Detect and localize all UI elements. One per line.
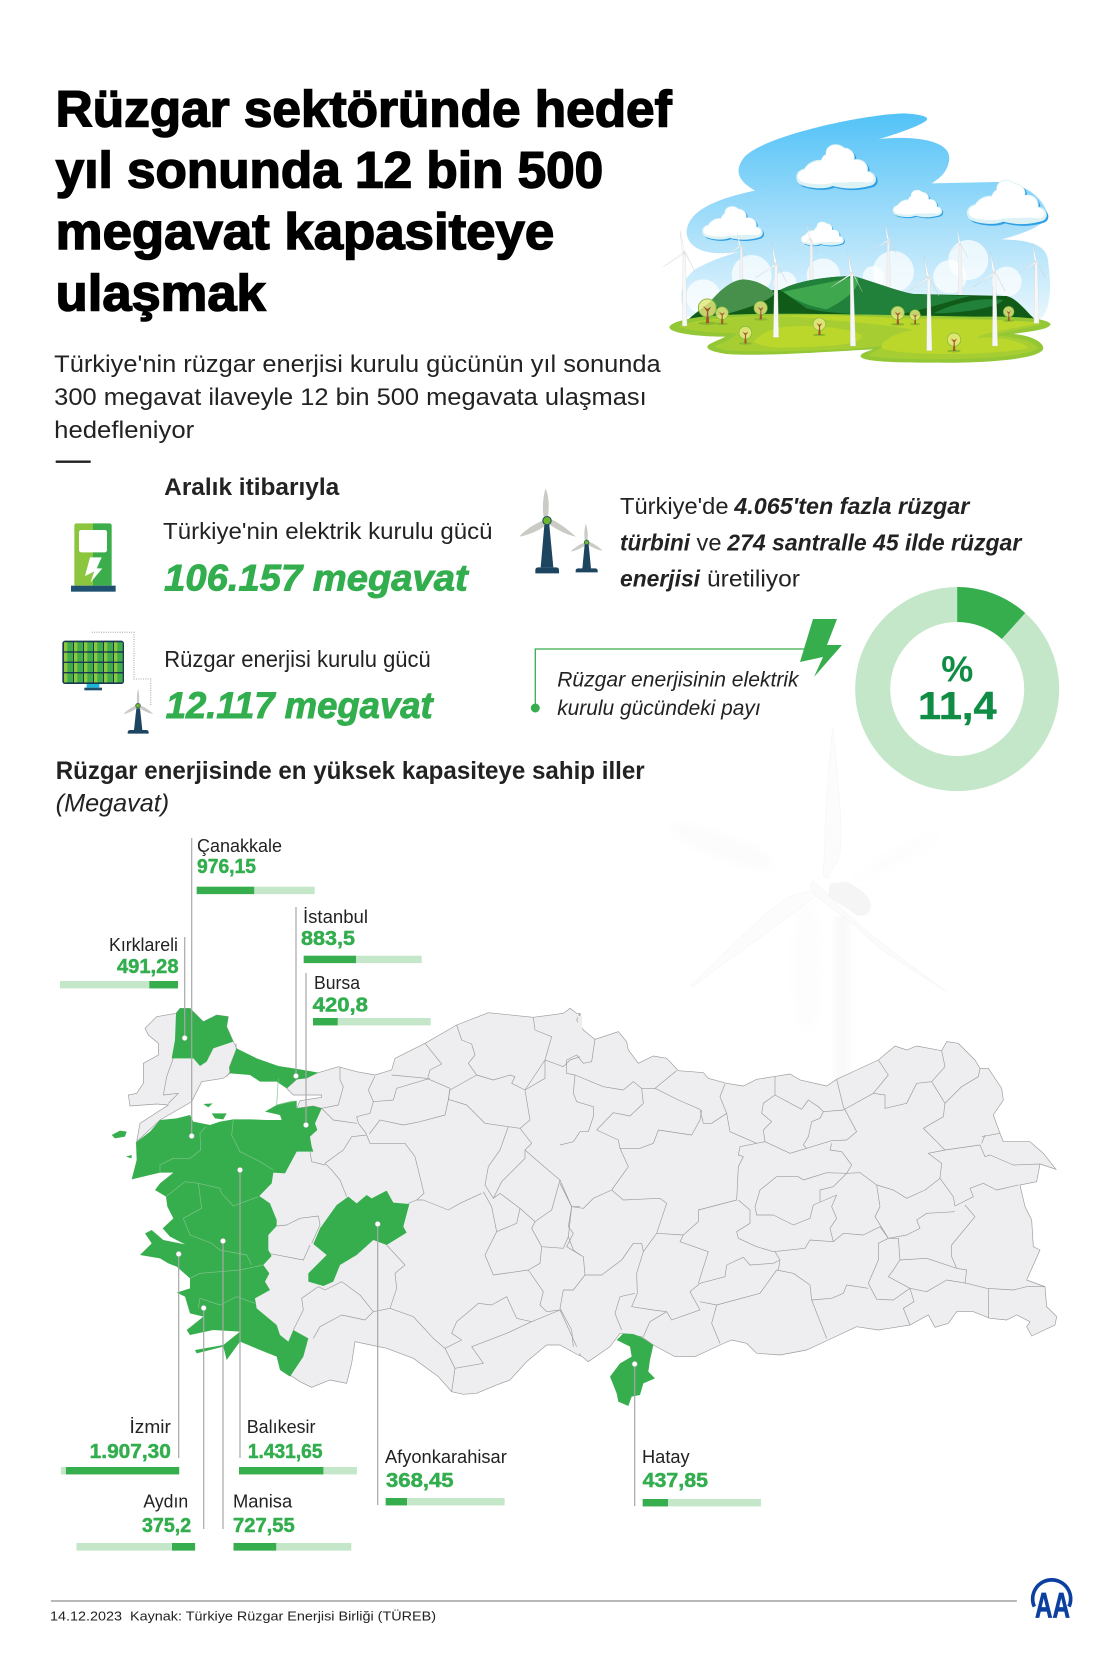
label: Afyonkarahisar: 368,45	[386, 1470, 454, 1492]
stat: total installed power	[163, 518, 492, 599]
icon: solar panel with turbine	[62, 632, 153, 734]
donut value	[918, 649, 997, 728]
leader lines and markers	[176, 838, 637, 1529]
label: Hatay: Hatay	[642, 1447, 690, 1467]
text: turbine and plant counts: enerjisi	[620, 566, 700, 592]
label: İstanbul: İstanbul	[303, 907, 368, 927]
stat: total installed power: 106.157 megavat	[164, 558, 469, 599]
label: Çanakkale: Çanakkale	[197, 836, 282, 856]
logo: AA: AA	[1035, 1586, 1070, 1625]
label: Balıkesir	[239, 1417, 357, 1474]
label: Aydın: Aydın	[143, 1492, 188, 1512]
label: Balıkesir: Balıkesir	[247, 1417, 316, 1437]
subtitle text: 300 megavat ilaveyle 12 bin 500 megavata ulaşması	[54, 384, 647, 411]
text: turbine and plant counts: 274 santralle 45 ilde rüzgar	[726, 530, 1023, 556]
label: Manisa: Manisa	[233, 1492, 293, 1512]
footer rule	[51, 1600, 1017, 1602]
highlighted province: Hatay	[610, 1333, 655, 1406]
icon: two wind turbines	[519, 488, 603, 573]
label: Hatay: 437,85	[643, 1470, 708, 1492]
text: turbine and plant counts: üretiliyor	[707, 566, 800, 592]
label: Kırklareli	[60, 935, 178, 988]
donut chart: wind share	[855, 587, 1059, 791]
title: ulaşmak	[56, 265, 266, 322]
stat: wind installed power: Rüzgar enerjisi kurulu gücü	[164, 646, 431, 672]
label: Bursa: Bursa	[314, 973, 361, 993]
highlighted province: İstanbul	[229, 1048, 318, 1088]
label: İstanbul: 883,5	[301, 928, 355, 950]
label: Balıkesir: 1.431,65	[248, 1441, 322, 1463]
label: İstanbul	[301, 907, 422, 963]
highlighted province: Afyonkarahisar	[308, 1191, 409, 1286]
watermark: large faint wind turbine	[666, 727, 947, 1080]
islands	[112, 1103, 227, 1158]
subtitle text	[54, 351, 661, 463]
title: yıl sonunda 12 bin 500	[56, 141, 603, 198]
highlighted provinces: Aegean block	[132, 1101, 322, 1377]
label: Aydın	[76, 1492, 195, 1551]
label: Çanakkale	[197, 836, 315, 894]
label: Hatay	[642, 1447, 761, 1506]
text: turbine and plant counts: Türkiye'de	[620, 493, 728, 519]
illustration: wind farm landscape	[663, 113, 1051, 363]
callout: wind share label with lightning bolt: Rüzgar enerjisinin elektrik	[557, 669, 800, 692]
label: Aydın: 375,2	[142, 1515, 191, 1537]
callout: wind share label with lightning bolt: kurulu gücündeki payı	[557, 697, 761, 720]
logo: AA	[1033, 1580, 1071, 1625]
subtitle text: Türkiye'nin rüzgar enerjisi kurulu gücünün yıl sonunda	[54, 351, 661, 378]
title	[56, 81, 673, 322]
map heading	[56, 757, 645, 818]
stat: wind installed power: 12.117 megavat	[166, 685, 434, 726]
label: Afyonkarahisar: Afyonkarahisar	[385, 1447, 507, 1467]
stat: wind installed power	[164, 646, 434, 726]
donut value: %	[941, 649, 973, 690]
donut value: 11,4	[918, 685, 997, 728]
label: İzmir: 1.907,30	[90, 1441, 171, 1463]
label: Kırklareli: 491,28	[117, 956, 178, 978]
text: turbine and plant counts	[620, 493, 1023, 592]
highlighted provinces: Thrace	[172, 1008, 233, 1066]
title: Rüzgar sektöründe hedef	[56, 81, 673, 138]
map heading: (Megavat)	[56, 790, 169, 818]
label: Bursa: 420,8	[313, 995, 368, 1017]
label: Manisa	[233, 1492, 351, 1551]
icon: charging station	[71, 523, 116, 592]
label: Manisa: 727,55	[233, 1515, 295, 1537]
heading: as of December: Aralık itibarıyla	[164, 474, 340, 501]
stat: total installed power: Türkiye'nin elektrik kurulu gücü	[163, 518, 492, 544]
text: turbine and plant counts: türbini	[620, 530, 690, 556]
callout: wind share label with lightning bolt	[531, 619, 842, 720]
label: Çanakkale: 976,15	[197, 856, 256, 878]
label: Kırklareli: Kırklareli	[109, 935, 178, 955]
subtitle text: hedefleniyor	[54, 417, 194, 444]
title: megavat kapasiteye	[56, 203, 554, 260]
text: turbine and plant counts: 4.065'ten fazla rüzgar	[733, 493, 971, 519]
source line: 14.12.2023 Kaynak: Türkiye Rüzgar Enerjisi Birliği (TÜREB)	[50, 1609, 436, 1624]
label: İzmir	[61, 1417, 179, 1474]
map of Turkey	[112, 1008, 1057, 1406]
label: Afyonkarahisar	[385, 1447, 507, 1505]
map heading: Rüzgar enerjisinde en yüksek kapasiteye sahip iller	[56, 757, 645, 785]
label: Bursa	[313, 973, 431, 1025]
label: İzmir: İzmir	[130, 1417, 171, 1437]
text: turbine and plant counts: ve	[696, 530, 722, 556]
